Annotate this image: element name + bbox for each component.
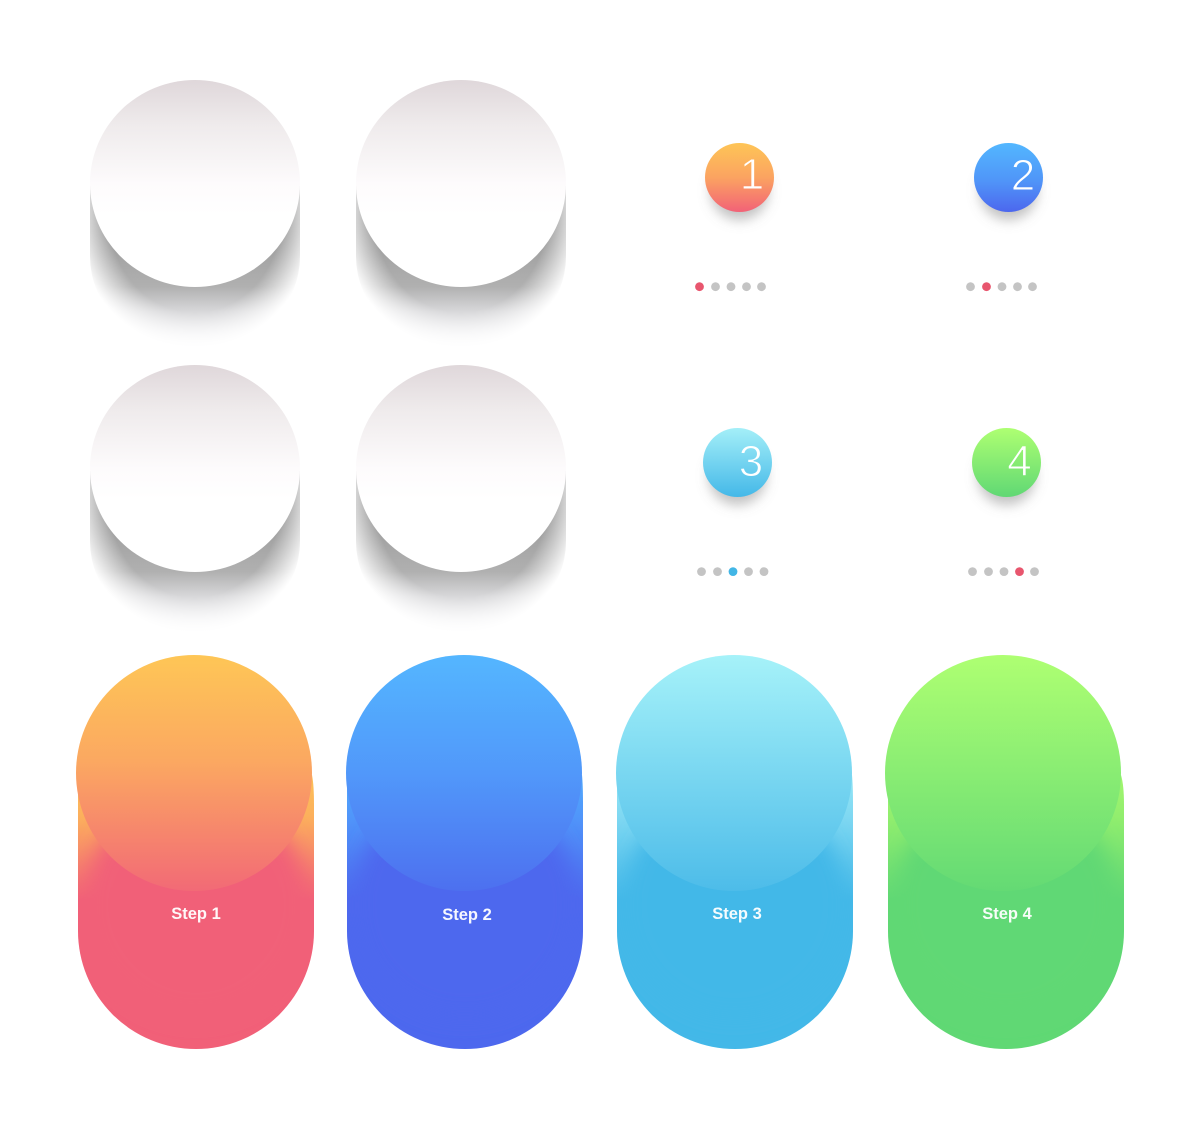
blank circle 3 with shadow	[88, 365, 302, 635]
blank circle 4 with shadow	[354, 365, 568, 635]
number badge 2: 2	[1011, 151, 1035, 200]
step 3 card: Step 3	[712, 905, 762, 923]
step 1 card: Step 1	[171, 905, 221, 923]
pagination dots 2	[966, 282, 1037, 291]
pagination dots 4	[968, 567, 1039, 576]
step 3 card	[609, 655, 861, 1060]
step 4 card	[880, 655, 1132, 1060]
number badge 1	[705, 143, 774, 220]
step 2 card: Step 2	[442, 906, 492, 924]
number badge 4	[972, 428, 1041, 505]
step 4 card: Step 4	[982, 905, 1033, 923]
blank circle 1 with shadow	[88, 80, 302, 350]
number badge 3	[703, 428, 772, 505]
number badge 2	[974, 143, 1043, 220]
blank circle 2 with shadow	[354, 80, 568, 350]
pagination dots 3	[697, 567, 768, 576]
pagination dots 1	[695, 282, 766, 291]
number badge 3: 3	[739, 437, 763, 486]
step 2 card	[339, 655, 591, 1060]
step 1 card	[70, 655, 322, 1060]
number badge 4: 4	[1007, 437, 1032, 486]
number badge 1: 1	[740, 150, 764, 199]
